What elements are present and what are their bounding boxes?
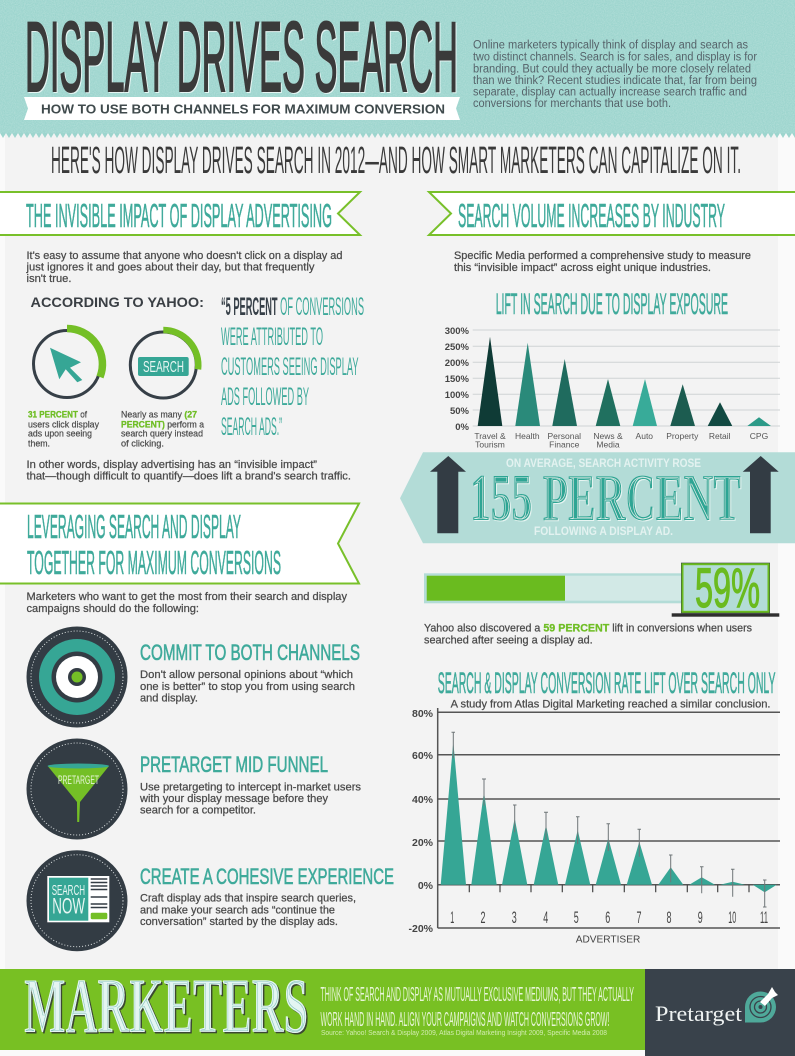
triangles [441, 742, 777, 892]
block: pretarget mid funnel: Use pretargeting to intercept in-market users [140, 782, 362, 794]
block: pretarget mid funnel: PRETARGET MID FUNNEL [140, 752, 328, 777]
block: pretarget mid funnel [139, 752, 362, 816]
intro paragraph: Online marketers typically think of display and search as [473, 40, 748, 52]
advertiser numbers: 10 [728, 908, 736, 927]
caption: 27 percent: Nearly as many (27 [121, 410, 197, 420]
arrow: left up [430, 456, 466, 533]
advertiser numbers: 2 [480, 908, 486, 927]
x axis title: ADVERTISER [576, 934, 641, 946]
y axis labels: 0% [418, 880, 434, 892]
advertiser numbers: 5 [574, 908, 579, 927]
advertiser numbers: 6 [605, 908, 610, 927]
block: commit to both channels: and display. [140, 692, 198, 704]
y axis labels: 80% [412, 708, 434, 720]
ribbon: leveraging search and display [0, 504, 359, 584]
text: yahoo 59 percent: searched after seeing a display ad. [424, 634, 593, 646]
caption: 27 percent: of clicking. [121, 438, 164, 448]
triangles [478, 337, 771, 426]
icon: funnel [26, 738, 128, 840]
icon: search gauge: SEARCH [143, 359, 184, 376]
text: specific media study [454, 250, 751, 274]
caption: 31 percent: 31 PERCENT of [28, 410, 87, 420]
block: create a cohesive experience: CREATE A COHESIVE EXPERIENCE [140, 864, 394, 889]
text: TOGETHER FOR MAXIMUM CONVERSIONS [27, 545, 281, 582]
icon: search now ad: SEARCH [52, 883, 85, 899]
intro paragraph: separate, display can actually increase search traffic and [473, 86, 747, 98]
pull quote [221, 293, 364, 441]
text: invisible impact intro: isn't true. [26, 273, 72, 285]
text: invisible impact conclusion [26, 459, 351, 482]
y axis labels: -20% [408, 923, 434, 935]
ribbon: leveraging search and display: LEVERAGING SEARCH AND DISPLAY [27, 509, 241, 546]
block: create a cohesive experience: conversation” started by the display ads. [140, 916, 338, 928]
industry labels: Tourism [475, 440, 505, 450]
icon: search now ad: NOW [52, 893, 85, 918]
caption: 31 percent [28, 410, 99, 448]
y axis labels: 0% [455, 422, 470, 433]
callout top line: ON AVERAGE, SEARCH ACTIVITY ROSE [506, 458, 701, 470]
text: yahoo 59 percent [424, 622, 752, 646]
industry labels: CPG [750, 431, 768, 441]
footer message [320, 984, 634, 1031]
advertiser numbers: 8 [666, 908, 672, 927]
industry labels: News & [593, 431, 623, 441]
axis ticks [469, 885, 749, 892]
advertiser numbers: 4 [543, 908, 548, 927]
progress graphic: 59 percent [424, 556, 779, 619]
caption: 27 percent: search query instead [121, 428, 203, 438]
block: pretarget mid funnel: search for a competitor. [140, 804, 256, 816]
logo panel: pretarget [645, 969, 795, 1056]
header teal textured background [0, 0, 795, 138]
heading: according to yahoo: ACCORDING TO YAHOO: [30, 295, 204, 310]
block: commit to both channels: one is better” to stop you from using search [140, 681, 355, 693]
footer: marketers banner [0, 962, 645, 1050]
text: invisible impact conclusion: In other words, display advertising has an “invisible impact” [26, 459, 317, 471]
logo target icon [745, 987, 778, 1022]
industry labels: Finance [549, 440, 580, 450]
block: create a cohesive experience: and make your search ads “continue the [140, 904, 335, 916]
error bars [452, 732, 766, 907]
icon: cursor gauge [34, 328, 102, 398]
icon: search gauge [130, 330, 198, 398]
y axis labels: 20% [412, 837, 434, 849]
y axis labels: 60% [412, 750, 434, 762]
y axis labels: 250% [445, 342, 470, 353]
bar chart: lift in search [445, 326, 780, 450]
icon: search now ad [26, 850, 128, 951]
advertiser numbers: 3 [512, 908, 517, 927]
footer heading: MARKETERS [24, 962, 308, 1049]
arrow: right up [743, 456, 779, 533]
advertiser numbers: 9 [698, 908, 703, 927]
caption: 31 percent: them. [28, 438, 50, 448]
y axis labels [445, 326, 470, 433]
caption: 27 percent: PERCENT) perform a [121, 420, 204, 430]
block: pretarget mid funnel: with your display message before they [139, 793, 328, 805]
text: invisible impact conclusion: that—though difficult to quantify—does lift a brand's search traffic. [26, 470, 351, 482]
block: commit to both channels [140, 640, 360, 704]
text: invisible impact intro: just ignores it and goes about their day, but that frequently [25, 262, 315, 274]
text: invisible impact intro: It's easy to assume that anyone who doesn't click on a display ad [26, 250, 342, 262]
y axis labels: 40% [412, 794, 434, 806]
text: specific media study: Specific Media performed a comprehensive study to measure [454, 250, 751, 262]
pull quote: WERE ATTRIBUTED TO [221, 323, 323, 351]
industry labels: Health [515, 431, 540, 441]
industry labels: Personal [548, 431, 581, 441]
text: CUSTOMERS SEEING DISPLAY [221, 353, 359, 381]
industry labels: Media [596, 440, 620, 450]
laptop [672, 556, 779, 619]
industry labels: Property [666, 431, 699, 441]
callout bottom line: FOLLOWING A DISPLAY AD. [534, 526, 673, 538]
y axis labels: 50% [450, 406, 470, 417]
intro paragraph: two distinct channels. Search is for sales, and display is for [473, 52, 757, 64]
advertiser numbers: 7 [636, 908, 642, 927]
text: invisible impact intro [25, 250, 342, 285]
industry labels: Auto [636, 431, 653, 441]
chart: conversion rate lift [408, 708, 780, 946]
intro paragraph [473, 40, 757, 110]
text: marketers intro: Marketers who want to get the most from their search and display [26, 591, 347, 603]
chart: conversion rate lift: 11 [760, 908, 768, 927]
block: commit to both channels: Don't allow personal opinions about “which [140, 669, 353, 681]
text: specific media study: this “invisible impact” across eight unique industries. [454, 262, 711, 274]
intro paragraph: than we think? Recent studies indicate that, far from being [473, 75, 757, 87]
intro paragraph: conversions for merchants that use both. [473, 98, 671, 110]
caption: 31 percent: users click display [28, 420, 99, 430]
block: create a cohesive experience [140, 864, 394, 928]
callout: 155 percent [400, 452, 795, 543]
ribbon: the invisible impact of display advertising [0, 192, 360, 235]
logo wordmark: Pretarget [655, 1001, 742, 1026]
y axis labels [408, 708, 434, 935]
footer sources: Source: Yahoo! Search & Display 2009, Atlas Digital Marketing Insight 2009, Specific Media 2008 [321, 1028, 607, 1037]
advertiser numbers [450, 908, 768, 927]
industry labels [474, 431, 768, 450]
block: create a cohesive experience: Craft display ads that inspire search queries, [140, 892, 356, 904]
y axis labels: 100% [445, 390, 470, 401]
intro paragraph: branding. But could they actually be more closely related [473, 64, 751, 76]
text: marketers intro [26, 591, 347, 615]
y axis labels: 150% [445, 374, 470, 385]
text: atlas study: A study from Atlas Digital Marketing reached a similar conclusion. [451, 698, 770, 710]
block: commit to both channels: COMMIT TO BOTH CHANNELS [140, 640, 360, 665]
icon: funnel: PRETARGET [58, 773, 99, 787]
industry labels: Travel & [474, 431, 506, 441]
text: marketers intro: campaigns should do the following: [26, 603, 199, 615]
subtitle banner [24, 97, 460, 120]
caption: 31 percent: ads upon seeing [28, 428, 92, 438]
advertiser numbers: 1 [450, 908, 454, 927]
text: yahoo 59 percent: Yahoo also discovered a 59 PERCENT lift in conversions when users [424, 622, 752, 634]
y axis labels: 300% [445, 326, 470, 337]
pull quote: ADS FOLLOWED BY [221, 383, 309, 411]
caption: 27 percent [121, 410, 204, 448]
pull quote: SEARCH ADS.” [221, 413, 282, 441]
header panel [0, 0, 795, 138]
subtitle banner: HOW TO USE BOTH CHANNELS FOR MAXIMUM CONVERSION [41, 102, 445, 116]
industry labels: Retail [709, 431, 731, 441]
text: “5 PERCENT OF CONVERSIONS [221, 293, 364, 321]
y axis labels: 200% [445, 358, 470, 369]
icon: target [26, 626, 128, 728]
